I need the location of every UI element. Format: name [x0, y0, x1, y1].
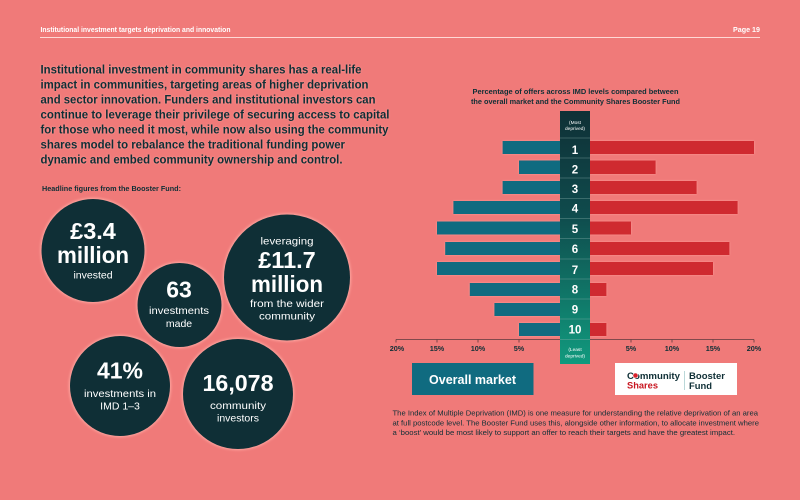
IMD level column	[560, 111, 590, 364]
legend: Community Shares Booster Fund logo: Shares	[627, 380, 658, 390]
axis	[396, 340, 754, 342]
IMD level column: 7	[572, 265, 578, 277]
legend: overall market: Overall market	[429, 372, 517, 387]
header title: Institutional investment targets deprivation and innovation	[40, 27, 230, 34]
chart title	[471, 87, 680, 106]
IMD explanatory note: a ‘boost’ would be most likely to support an offer to reach their targets and have the greatest impact.	[392, 428, 735, 437]
intro paragraph: shares model to rebalance the traditional funding power	[40, 138, 345, 152]
stat: leveraging £11.7 million: million	[251, 271, 323, 297]
stat: leveraging £11.7 million: from the wider	[250, 298, 325, 310]
legend: overall market	[412, 363, 534, 395]
sub-heading: headline figures: Headline figures from the Booster Fund:	[42, 184, 181, 193]
axis labels: 15%	[706, 344, 721, 353]
stat: 63 investments made	[136, 262, 222, 348]
stat: £3.4 million invested	[40, 198, 146, 303]
stat: 41% investments in IMD 1-3: investments in	[84, 388, 156, 400]
intro paragraph: dynamic and embed community ownership and control.	[40, 154, 342, 166]
IMD level column: 6	[572, 244, 578, 256]
legend: Community Shares Booster Fund logo: Booster	[689, 371, 725, 382]
bars: overall market	[437, 141, 560, 336]
bars: Community Shares Booster Fund	[590, 141, 754, 336]
IMD level column: 4	[572, 204, 579, 216]
axis labels: 5%	[626, 344, 637, 353]
IMD level column: 8	[572, 284, 579, 296]
stat: £3.4 million invested: £3.4	[70, 218, 116, 244]
IMD level column: 3	[572, 184, 578, 196]
stat: leveraging £11.7 million: community	[259, 310, 316, 322]
legend: Community Shares Booster Fund logo: Community	[627, 371, 680, 381]
IMD level column: 10	[569, 324, 581, 336]
intro paragraph: for those who need it most, while now also using the community	[40, 124, 389, 136]
IMD level column: (Least	[568, 347, 582, 353]
intro paragraph: Institutional investment in community shares has a real-life	[40, 64, 362, 76]
stat: 63 investments made: made	[166, 318, 192, 330]
IMD level column: deprived)	[565, 354, 585, 360]
stat circles	[40, 198, 351, 450]
legend: Community Shares Booster Fund logo	[615, 363, 737, 395]
stat: leveraging £11.7 million: leveraging	[260, 236, 314, 248]
axis labels: 10%	[665, 344, 680, 353]
stat: 63 investments made: 63	[166, 276, 192, 302]
intro paragraph: and sector innovation. Funders and institutional investors can	[40, 94, 376, 106]
intro paragraph: impact in communities, targeting areas of higher deprivation	[40, 78, 368, 92]
stat: 16,078 community investors: investors	[217, 412, 259, 424]
stat: 41% investments in IMD 1-3: 41%	[97, 358, 143, 384]
IMD level column: 9	[572, 304, 578, 316]
IMD explanatory note: at full postcode level. The Booster Fund uses this, alongside other information, to allocate investment where	[392, 418, 759, 428]
stat: 41% investments in IMD 1-3	[69, 335, 171, 437]
intro paragraph: continue to leverage their privilege of securing access to capital	[40, 108, 390, 122]
stat: leveraging £11.7 million	[223, 214, 351, 342]
IMD explanatory note	[392, 408, 759, 437]
stat: £3.4 million invested: million	[57, 242, 129, 268]
chart title: Percentage of offers across IMD levels compared between	[472, 87, 678, 96]
stat: 16,078 community investors	[182, 338, 294, 450]
stat: £3.4 million invested: invested	[73, 270, 113, 282]
stat: 16,078 community investors: 16,078	[202, 370, 274, 396]
axis labels: 10%	[471, 344, 486, 353]
diverging bar chart	[390, 111, 762, 364]
axis labels: 20%	[390, 344, 405, 353]
page number: Page 19	[733, 25, 760, 34]
IMD explanatory note: The Index of Multiple Deprivation (IMD) is one measure for understanding the relative deprivation of an area	[392, 408, 759, 418]
axis labels: 5%	[514, 344, 525, 353]
stat: 16,078 community investors: community	[210, 400, 267, 412]
IMD level column: 1	[572, 145, 579, 157]
stat: 41% investments in IMD 1-3: IMD 1–3	[100, 400, 140, 412]
IMD level column: deprived)	[565, 126, 585, 132]
intro paragraph	[40, 64, 390, 166]
IMD level column: 2	[572, 164, 578, 176]
IMD level column: 5	[572, 224, 579, 236]
axis labels: 20%	[747, 344, 762, 353]
stat: 63 investments made: investments	[149, 305, 209, 317]
axis labels: 15%	[430, 344, 445, 353]
legend: Community Shares Booster Fund logo: Fund	[689, 381, 712, 392]
chart title: the overall market and the Community Shares Booster Fund	[471, 97, 680, 106]
IMD level column: (Most	[569, 120, 582, 126]
stat: leveraging £11.7 million: £11.7	[258, 247, 316, 273]
axis labels	[390, 344, 762, 353]
